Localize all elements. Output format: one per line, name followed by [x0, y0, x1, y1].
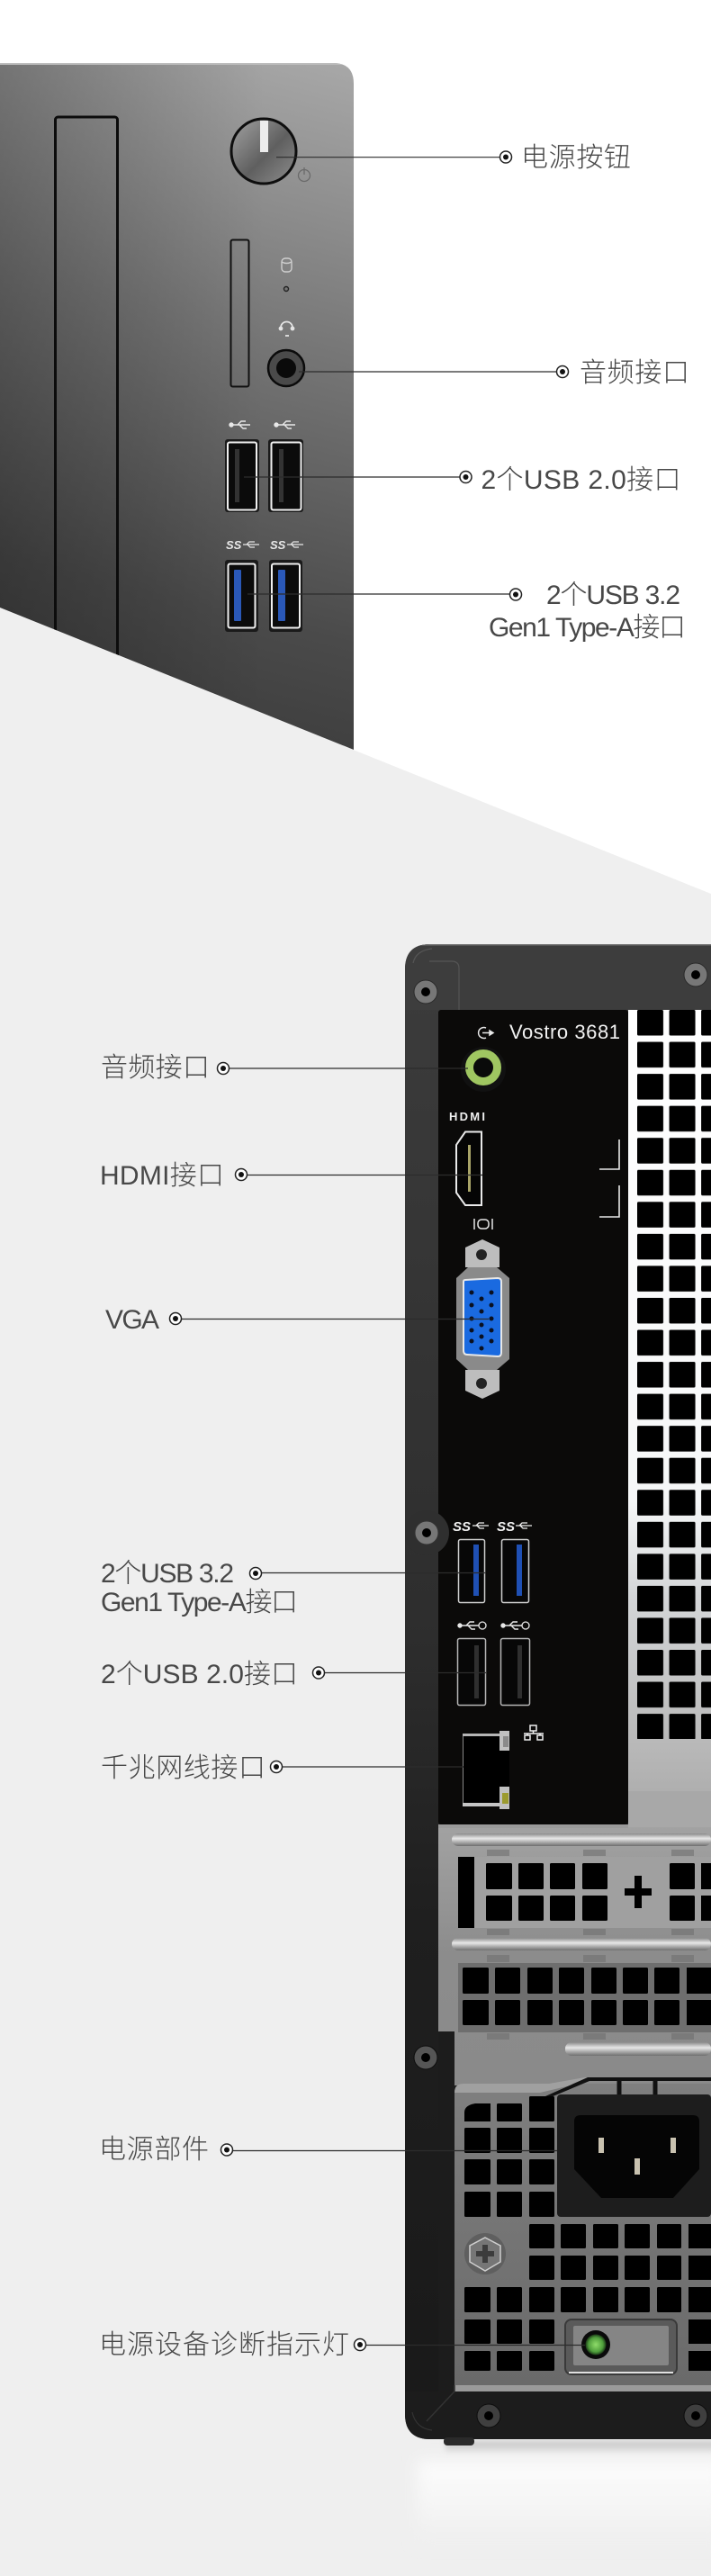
optical drive slot	[56, 117, 117, 693]
callout: HDMI	[100, 1161, 482, 1191]
callout: usb 3.2: 2个USB 3.2	[546, 581, 680, 610]
callout: usb 3.2	[248, 581, 686, 643]
ethernet port	[463, 1731, 509, 1809]
dark side column lower	[438, 2031, 454, 2085]
model name: Vostro 3681	[509, 1021, 620, 1043]
callout: usb 2.0: 2个USB 2.0接口	[481, 465, 680, 495]
black port panel	[438, 1010, 628, 1824]
small stamped tabs	[487, 1850, 694, 2040]
callout: power diagnostic light: 电源设备诊断指示灯	[99, 2330, 349, 2360]
usb 3.2 ports	[225, 560, 302, 632]
audio port, green	[465, 1049, 501, 1085]
expansion slot cover with vents	[458, 1857, 711, 1928]
callout: rear usb 2.0: 2个USB 2.0接口	[101, 1660, 298, 1689]
audio jack	[268, 350, 304, 386]
bottom frame	[405, 2385, 711, 2439]
VGA port	[456, 1239, 509, 1399]
callout: power button: 电源按钮	[521, 143, 631, 173]
hex screw	[464, 2233, 506, 2274]
reflection under rear chassis	[418, 2441, 711, 2542]
rear grille	[628, 1010, 711, 1824]
callout: HDMI: HDMI接口	[100, 1161, 224, 1191]
callout: rear audio	[101, 1053, 468, 1083]
icon: headset	[279, 322, 293, 336]
chassis screws	[414, 963, 707, 2427]
power supply vents	[464, 2096, 711, 2371]
callout: VGA: VGA	[105, 1305, 159, 1335]
icons: rear usb 3.2 symbols	[453, 1519, 532, 1535]
power button	[231, 119, 310, 184]
mount bulge and screw	[416, 1514, 449, 1552]
callout: power supply: 电源部件	[99, 2135, 209, 2165]
VGA symbol	[474, 1219, 492, 1229]
panel: rear of desktop tower	[404, 944, 711, 2439]
icons: rear usb 2.0 symbols	[458, 1622, 529, 1629]
power supply diagnostic light	[565, 2319, 677, 2374]
bracket marks	[599, 1139, 619, 1217]
foot	[444, 2437, 474, 2445]
rail 3	[565, 2042, 711, 2056]
icons: usb 2.0 symbols	[230, 421, 295, 428]
rail 2	[452, 1938, 711, 1950]
HDMI port	[456, 1132, 482, 1205]
rear usb 2.0 ports	[457, 1638, 529, 1705]
HDMI label: HDMI	[449, 1110, 485, 1123]
second vent block	[458, 1963, 711, 2032]
callout: power supply	[99, 2135, 557, 2165]
icon: network	[524, 1725, 544, 1740]
callout: audio jack	[299, 358, 689, 388]
icons: usb 3.2 symbols: SS	[270, 538, 286, 552]
callout: rear usb 3.2: 2个USB 3.2	[101, 1559, 234, 1589]
chassis corner contour	[413, 949, 459, 1010]
callout: rear usb 3.2	[101, 1559, 486, 1617]
callout: rear audio: 音频接口	[101, 1053, 210, 1083]
callout: rear usb 2.0	[101, 1660, 486, 1689]
icons: rear usb 3.2 symbols: SS	[453, 1519, 471, 1535]
callout: power button	[276, 143, 631, 173]
callout: power diagnostic light	[99, 2330, 585, 2360]
callout: usb 2.0	[244, 465, 680, 495]
icon: audio out	[479, 1028, 493, 1039]
card reader slot	[230, 239, 248, 387]
usb 2.0 ports	[225, 439, 303, 512]
icon: hard drive activity	[282, 258, 292, 292]
rear usb 3.2 ports	[459, 1539, 529, 1602]
callout: audio jack: 音频接口	[580, 358, 689, 388]
icons: usb 3.2 symbols: SS	[226, 538, 242, 552]
power inlet socket	[557, 2094, 711, 2217]
callout: usb 3.2: Gen1 Type-A接口	[489, 613, 686, 643]
callout: rear usb 3.2: Gen1 Type-A接口	[101, 1588, 298, 1617]
icons: usb 3.2 symbols	[226, 541, 303, 549]
panel: front of desktop tower	[0, 63, 354, 752]
callout: gigabit ethernet	[101, 1753, 464, 1783]
callout: VGA	[105, 1305, 489, 1335]
metal back plate	[438, 1824, 711, 2085]
icons: rear usb 3.2 symbols: SS	[497, 1519, 515, 1535]
callout: gigabit ethernet: 千兆网线接口	[101, 1753, 266, 1783]
rail 1	[452, 1833, 711, 1846]
power supply plate	[454, 2077, 711, 2385]
